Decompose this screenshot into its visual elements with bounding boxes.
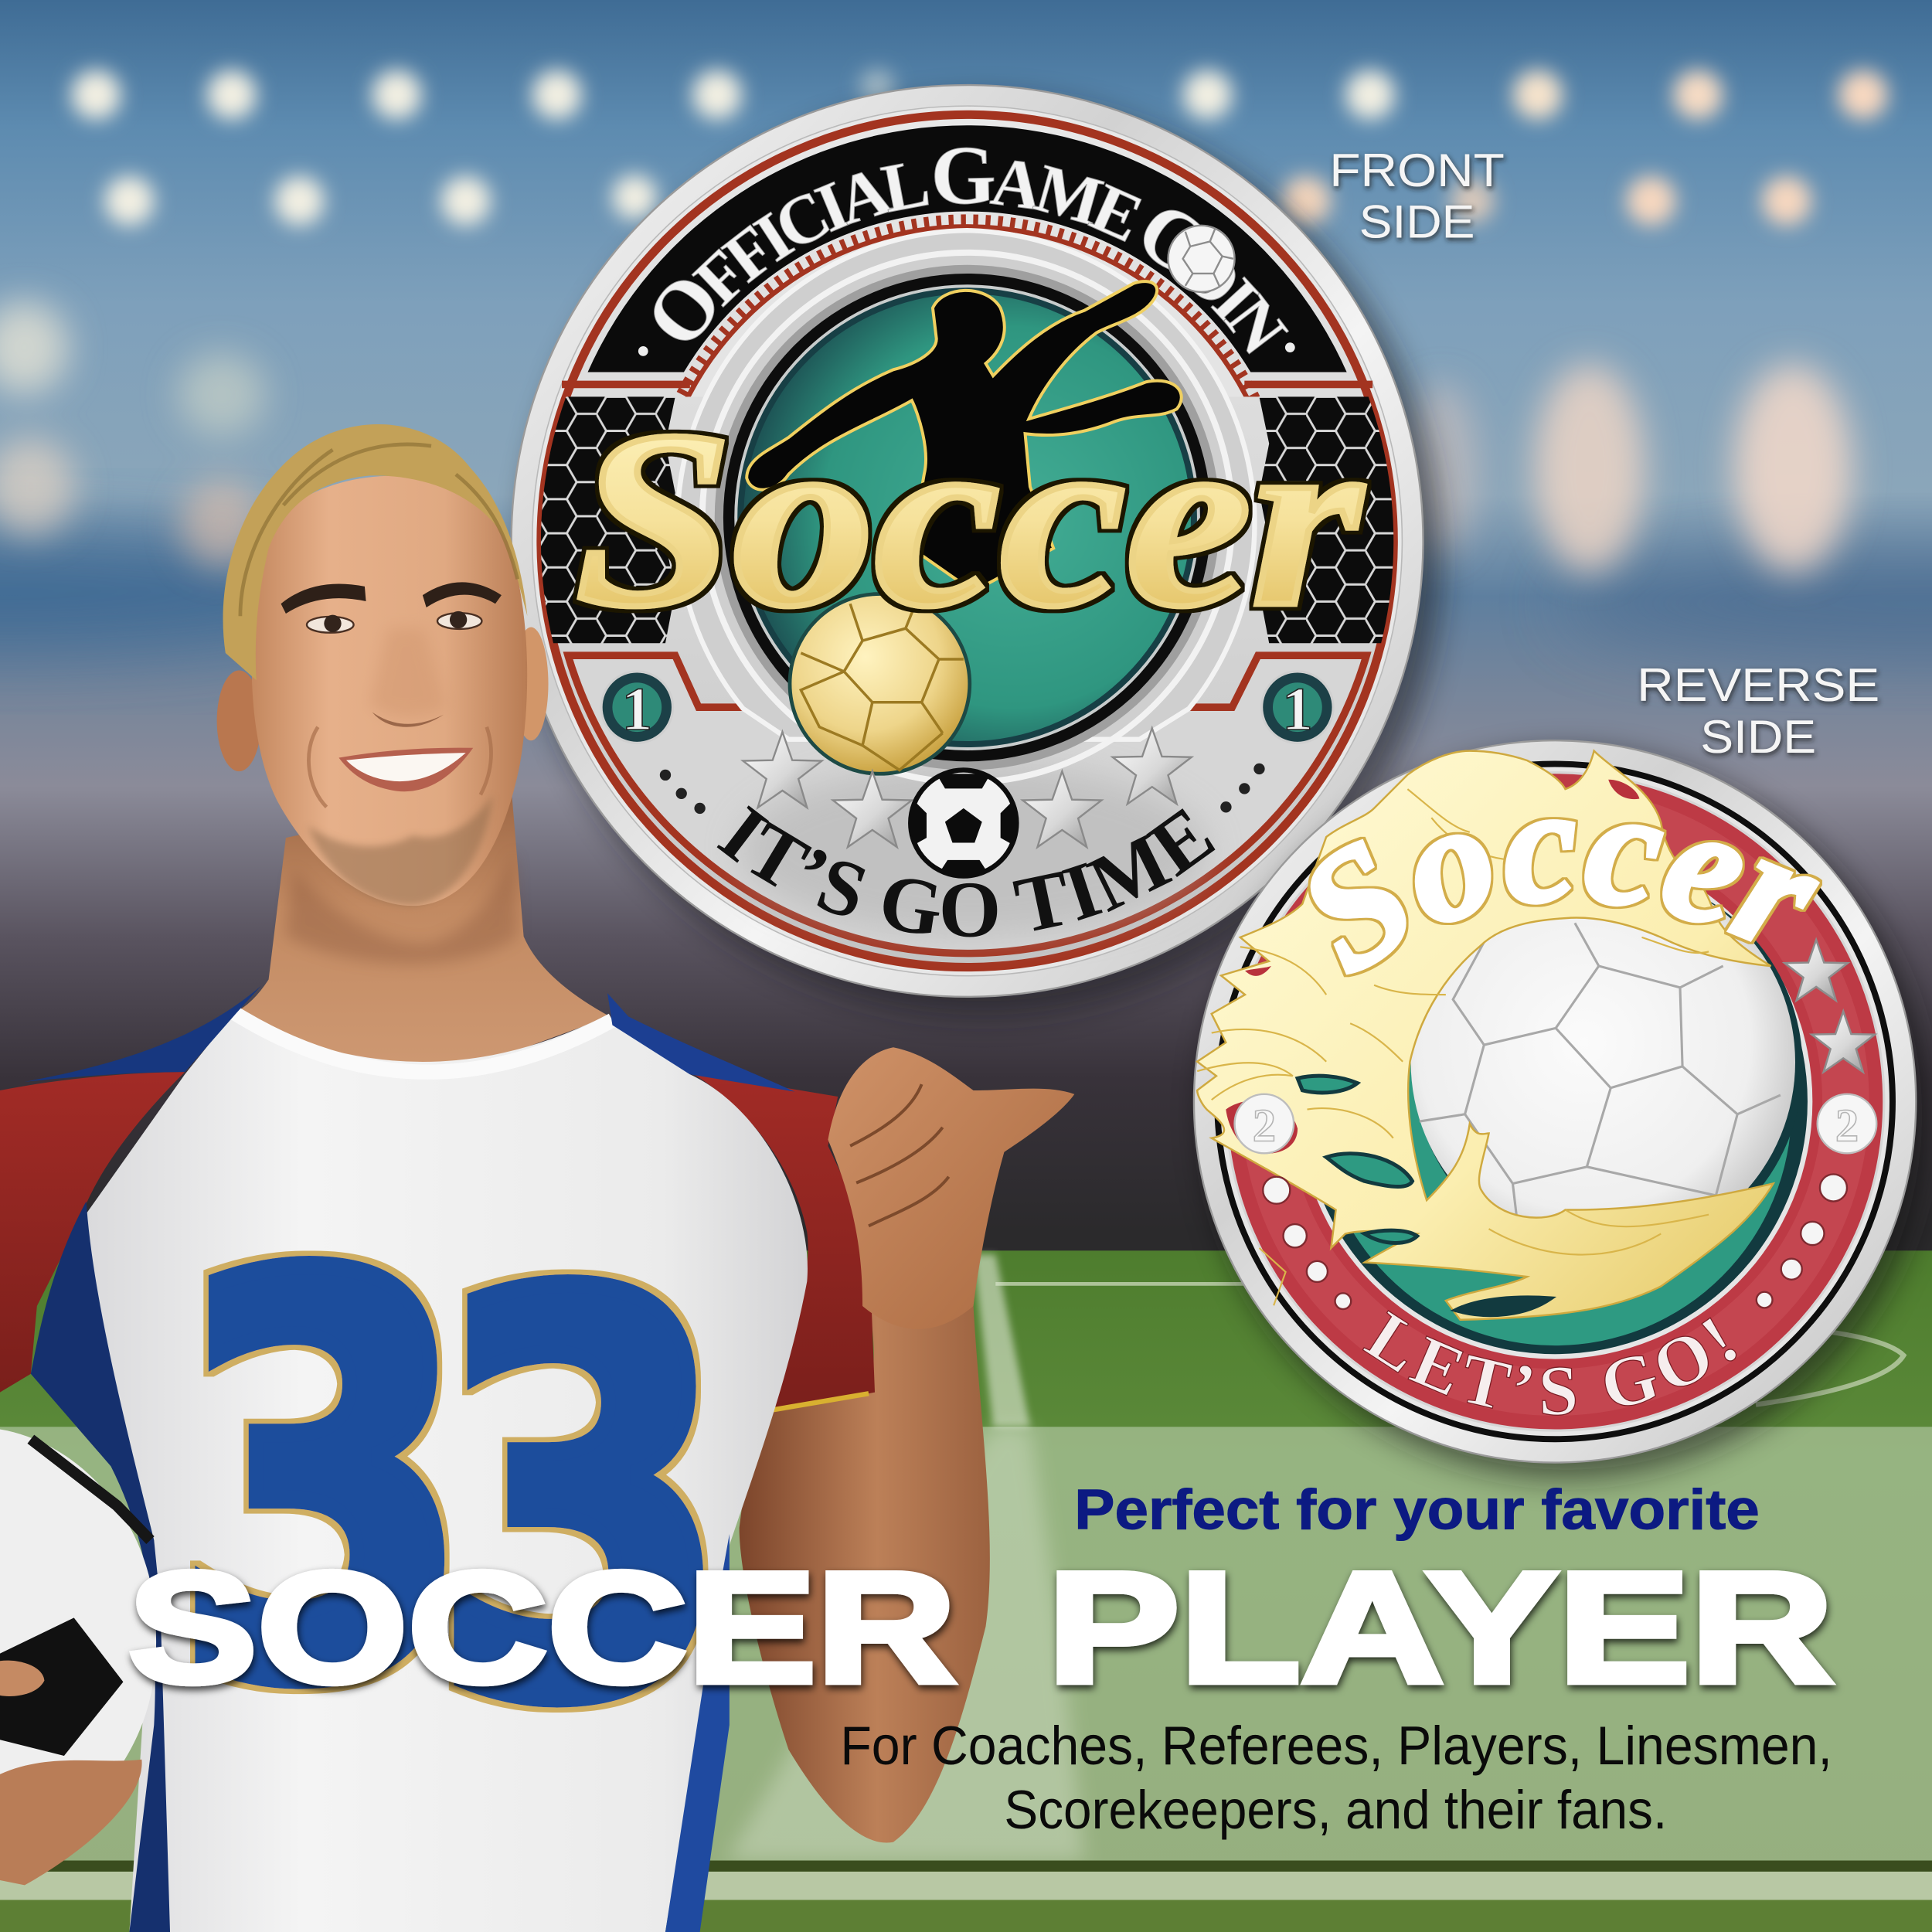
reverse coin shadow	[1202, 750, 1932, 1480]
right shoulder stripe	[607, 993, 794, 1092]
Soccer script lettering, front: Soccer	[576, 379, 1366, 658]
eyebrow left	[281, 584, 366, 614]
left sleeve	[0, 1072, 185, 1393]
gold soccer ball	[790, 594, 970, 774]
ear left	[217, 670, 261, 771]
left shoulder stripe	[25, 986, 261, 1082]
head	[252, 476, 527, 906]
stadium lights, lower blurred	[0, 301, 1852, 573]
serrated red ring	[677, 214, 1260, 397]
reverse stars	[1784, 940, 1875, 1072]
label: reverse side: REVERSE	[1637, 658, 1879, 711]
black mini soccer ball	[904, 770, 1022, 877]
silver textured ring	[678, 230, 1254, 740]
motto text: let's go: LET’S GO!	[1362, 1310, 1737, 1416]
grass field with markings	[0, 1250, 1932, 1932]
bottom field stripes	[0, 1861, 1932, 1932]
teal medallion	[723, 274, 1211, 761]
hair strands	[240, 444, 518, 616]
face	[217, 424, 549, 964]
teal inner medallion	[1298, 844, 1812, 1359]
lower hand holding ball	[0, 1760, 142, 1885]
center circle arc	[1756, 1328, 1903, 1405]
smile creases	[308, 727, 492, 807]
field line vertical	[974, 1254, 1030, 1427]
heading: perfect for your favorite: Perfect for your favorite	[1074, 1478, 1760, 1542]
hair	[223, 424, 527, 680]
coin rim	[512, 85, 1423, 997]
label: reverse side: SIDE	[1700, 710, 1816, 763]
flame teal gaps	[1298, 1076, 1551, 1315]
stadium lights, upper rows	[71, 69, 1888, 226]
main title: soccer player	[128, 1539, 1833, 1716]
silver stars	[743, 728, 1192, 847]
eyebrow right	[423, 582, 502, 607]
badge 2 right: 2	[1835, 1100, 1859, 1151]
red enamel ring	[1226, 773, 1884, 1430]
small ball in coin word	[1168, 226, 1235, 292]
banner dot right	[1285, 342, 1295, 352]
soccer player	[0, 424, 1074, 1932]
reverse coin	[1193, 733, 1932, 1499]
coin shadow	[525, 99, 1441, 1015]
arm	[740, 1244, 990, 1842]
translucent text band	[0, 1427, 1932, 1861]
main title: soccer player: PLAYER	[1047, 1539, 1833, 1716]
jersey body	[87, 1013, 808, 1932]
collar	[234, 1013, 612, 1072]
dots right	[1220, 764, 1265, 812]
red banner underline right	[1244, 382, 1372, 386]
label: front side: SIDE	[1359, 196, 1475, 248]
Soccer script lettering, reverse: Soccer	[1308, 817, 1822, 977]
badge 2 left	[1235, 1094, 1294, 1153]
front coin	[507, 80, 1461, 1022]
label: front side	[1329, 144, 1505, 248]
stubble	[308, 794, 493, 906]
field line horizontal	[995, 1283, 1244, 1285]
stadium sky background	[0, 0, 1932, 1269]
red ring	[541, 114, 1393, 968]
banner dot left	[638, 346, 648, 356]
teeth	[346, 753, 466, 781]
smile	[338, 748, 473, 791]
honeycomb panel right	[1259, 396, 1405, 643]
eye left	[307, 615, 354, 633]
jersey number 33: 3	[174, 1164, 471, 1802]
left side panel	[31, 1202, 170, 1932]
thumbs-up hand	[828, 1047, 1074, 1329]
badge 1 right: 1	[1282, 675, 1313, 743]
badge 2 left: 2	[1253, 1100, 1276, 1151]
reverse coin rim	[1194, 740, 1916, 1463]
silver soccer ball	[1411, 870, 1803, 1262]
sleeve trim	[760, 1393, 869, 1412]
nose	[369, 628, 446, 716]
red flame gaps	[1226, 780, 1639, 1154]
subtitle lines: Scorekeepers, and their fans.	[1004, 1779, 1667, 1840]
under-chin shadow	[286, 850, 518, 964]
jersey number 33: 3	[433, 1182, 730, 1821]
main title: soccer player: SOCCER	[128, 1539, 956, 1716]
badge 1 left: 1	[621, 675, 652, 743]
dots left	[660, 770, 706, 814]
top black banner	[588, 125, 1347, 372]
nose tip	[372, 713, 444, 727]
subtitle lines: For Coaches, Referees, Players, Linesmen,	[840, 1715, 1832, 1776]
ball under arm	[0, 1429, 156, 1774]
badge 2 right	[1818, 1094, 1876, 1153]
silver dots	[1263, 1174, 1847, 1309]
motto text: it's go time: IT’S GO TIME	[717, 805, 1215, 937]
right side panel	[665, 1534, 730, 1932]
flames	[1197, 751, 1774, 1320]
neck	[234, 788, 610, 1087]
ear right	[514, 628, 549, 740]
fingertip	[0, 1661, 44, 1696]
flame inner lines	[1197, 789, 1709, 1305]
right sleeve	[690, 1072, 875, 1413]
honeycomb panel left	[537, 396, 675, 643]
worn field patch	[727, 1427, 1084, 1861]
badge 1 left	[601, 672, 673, 743]
red banner underline left	[562, 382, 690, 386]
subtitle lines	[840, 1715, 1832, 1840]
label: reverse side	[1637, 658, 1879, 763]
label: front side: FRONT	[1329, 144, 1505, 196]
player silhouette	[747, 281, 1182, 591]
badge 1 right	[1262, 672, 1333, 743]
lower silver field	[568, 655, 1366, 954]
jersey number 33	[174, 1164, 730, 1821]
banner text: official game coin: OFFICIAL GAME COIN	[654, 147, 1289, 355]
eye right	[437, 611, 481, 629]
